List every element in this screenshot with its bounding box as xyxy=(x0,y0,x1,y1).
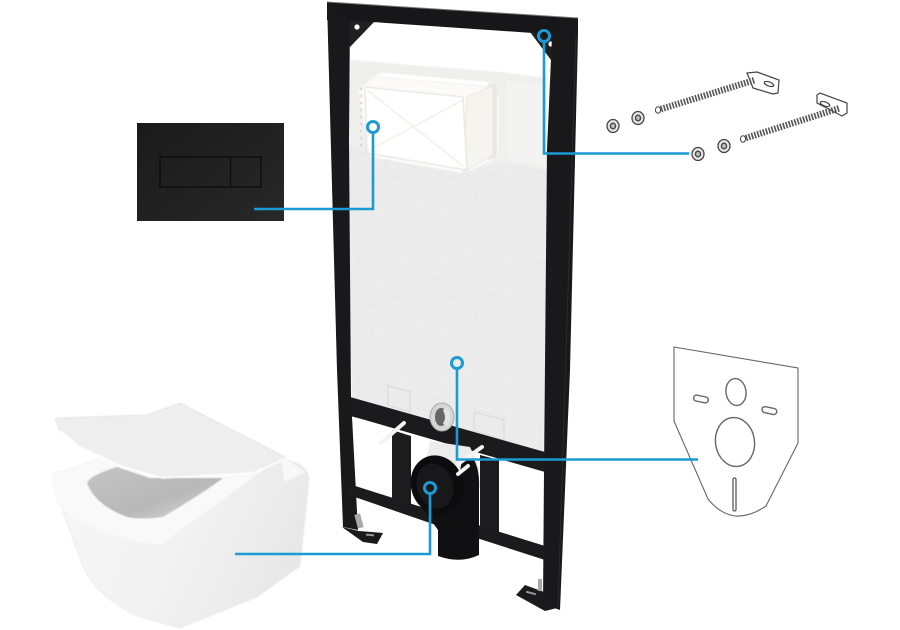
pipe: outlet elbow xyxy=(420,460,479,560)
flush plate xyxy=(137,123,284,221)
callout lines xyxy=(235,30,698,554)
frame: top bar xyxy=(327,2,578,42)
frame: left upright xyxy=(327,2,358,530)
mat: holes xyxy=(693,377,777,511)
callout: bolts xyxy=(538,30,689,154)
frame: lower cross bar xyxy=(346,484,545,560)
frame: feet xyxy=(342,513,557,611)
toilet: hinge side xyxy=(282,460,306,482)
mounting pins xyxy=(381,423,482,474)
toilet: bowl interior xyxy=(87,467,223,518)
flush buttons xyxy=(160,157,261,187)
overflow ring xyxy=(430,403,454,431)
fixing bolts and nuts xyxy=(607,72,847,160)
toilet: seat lid xyxy=(55,403,287,478)
steel frame xyxy=(327,2,578,611)
pipe: white bracket xyxy=(425,441,480,495)
bolt: lower xyxy=(740,93,847,142)
frame: gussets xyxy=(340,20,554,64)
right cistern section xyxy=(507,81,547,168)
frame: right upright xyxy=(543,18,578,610)
upper cistern section xyxy=(346,60,548,172)
bolt: upper xyxy=(656,72,779,113)
panel: cistern panel xyxy=(346,60,548,452)
callout: acoustic mat xyxy=(452,358,698,460)
toilet: rim xyxy=(53,458,280,545)
drain pipe xyxy=(403,441,480,560)
callout: toilet xyxy=(235,482,436,554)
callout: flush plate xyxy=(254,122,378,209)
pipe: socket xyxy=(403,448,471,522)
lower access recesses xyxy=(388,386,504,440)
toilet: body xyxy=(53,458,309,628)
service box xyxy=(358,72,499,173)
nuts xyxy=(607,112,730,160)
frame: upper cross bar xyxy=(350,397,545,472)
frame: vertical struts xyxy=(392,430,499,536)
toilet xyxy=(53,403,309,628)
acoustic mat xyxy=(674,347,798,516)
